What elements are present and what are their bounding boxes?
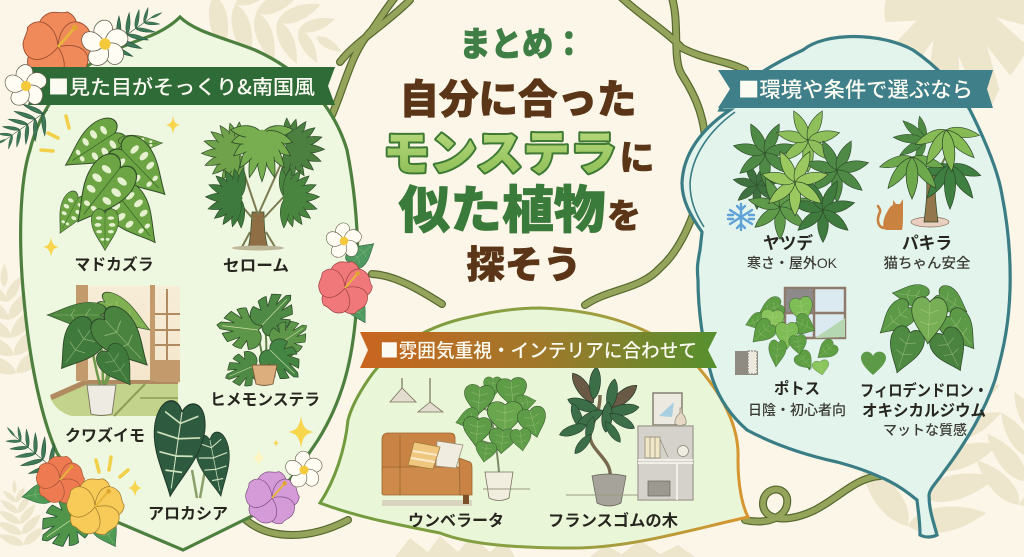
lamps — [390, 378, 443, 412]
plant: pachira — [878, 113, 985, 227]
flower: plumeria over banner — [3, 65, 48, 109]
plant: selloum — [201, 117, 325, 250]
banner: appearance: ■見た目がそっくり&南国風 — [48, 71, 315, 100]
title line: monstera particle: に — [619, 139, 655, 178]
title line: monstera: モンステラ — [383, 127, 617, 180]
plant: ficus elastica — [558, 366, 641, 506]
banner: environment: ■環境や条件で選ぶなら — [738, 74, 973, 104]
title line: sagasou: 探そう — [466, 245, 582, 287]
banner: environment — [718, 70, 993, 108]
banner: appearance — [28, 67, 335, 105]
panel: environment and conditions — [682, 36, 1010, 537]
blind — [735, 351, 758, 375]
flowers: bottom centre — [242, 451, 324, 528]
title line: object particle: を — [607, 198, 641, 236]
label: madokazura: マドカズラ — [74, 255, 154, 274]
sublabel: pothos: 日陰・初心者向 — [748, 402, 846, 418]
icon: cat — [878, 199, 903, 230]
plant: hime monstera — [214, 282, 316, 393]
label: philodendron oxycardium: フィロデンドロン・ — [860, 381, 988, 400]
label: selloum: セローム — [223, 258, 289, 275]
label: yatsude: ヤツデ — [763, 233, 813, 253]
label: pothos: ポトス — [774, 380, 820, 398]
plant: pothos — [743, 294, 840, 376]
banner: interior: ■雰囲気重視・インテリアに合わせて — [380, 336, 697, 363]
title line: jibun ni atta: 自分に合った — [400, 78, 636, 122]
title line: nita shokubutsu: 似た植物 — [398, 182, 606, 239]
icon: heart — [861, 352, 886, 375]
sofa — [382, 433, 472, 504]
sublabel: yatsude: 寒さ・屋外OK — [747, 255, 838, 271]
flowers: top left behind banner — [0, 0, 174, 163]
flowers: bottom left — [0, 412, 127, 557]
panel: appearance and tropical feel — [21, 17, 358, 550]
vines — [246, 0, 880, 535]
plant: yatsude — [732, 109, 870, 242]
label: umbellata: ウンベラータ — [408, 512, 504, 530]
flowers: right of left panel — [315, 223, 381, 328]
plant: madokazura — [49, 113, 181, 255]
label: pachira: パキラ — [902, 234, 952, 253]
label: ficus elastica: フランスゴムの木 — [548, 511, 678, 530]
plant: philodendron oxycardium — [871, 282, 986, 378]
title line: matome: まとめ： — [460, 26, 584, 64]
icon: snowflake — [728, 204, 754, 230]
sublabel: philodendron: マットな質感 — [883, 422, 967, 438]
plant: alocasia — [145, 399, 237, 500]
label: alocasia: アロカシア — [148, 505, 228, 523]
label: philodendron second line: オキシカルジウム — [862, 402, 986, 420]
shelf and picture — [483, 393, 693, 500]
panel: interior atmosphere — [320, 308, 748, 548]
banner: interior — [360, 332, 717, 368]
label: kuwazuimo: クワズイモ — [65, 426, 145, 445]
window — [785, 288, 845, 338]
sparkles around alocasia — [96, 416, 314, 497]
plant: umbellata — [453, 377, 551, 500]
title — [383, 26, 655, 287]
label: hime monstera: ヒメモンステラ — [210, 392, 320, 409]
sublabel: pachira: 猫ちゃん安全 — [884, 255, 970, 271]
sparkles around madokazura — [41, 116, 180, 257]
plant: kuwazuimo with shoji scene — [46, 285, 180, 416]
